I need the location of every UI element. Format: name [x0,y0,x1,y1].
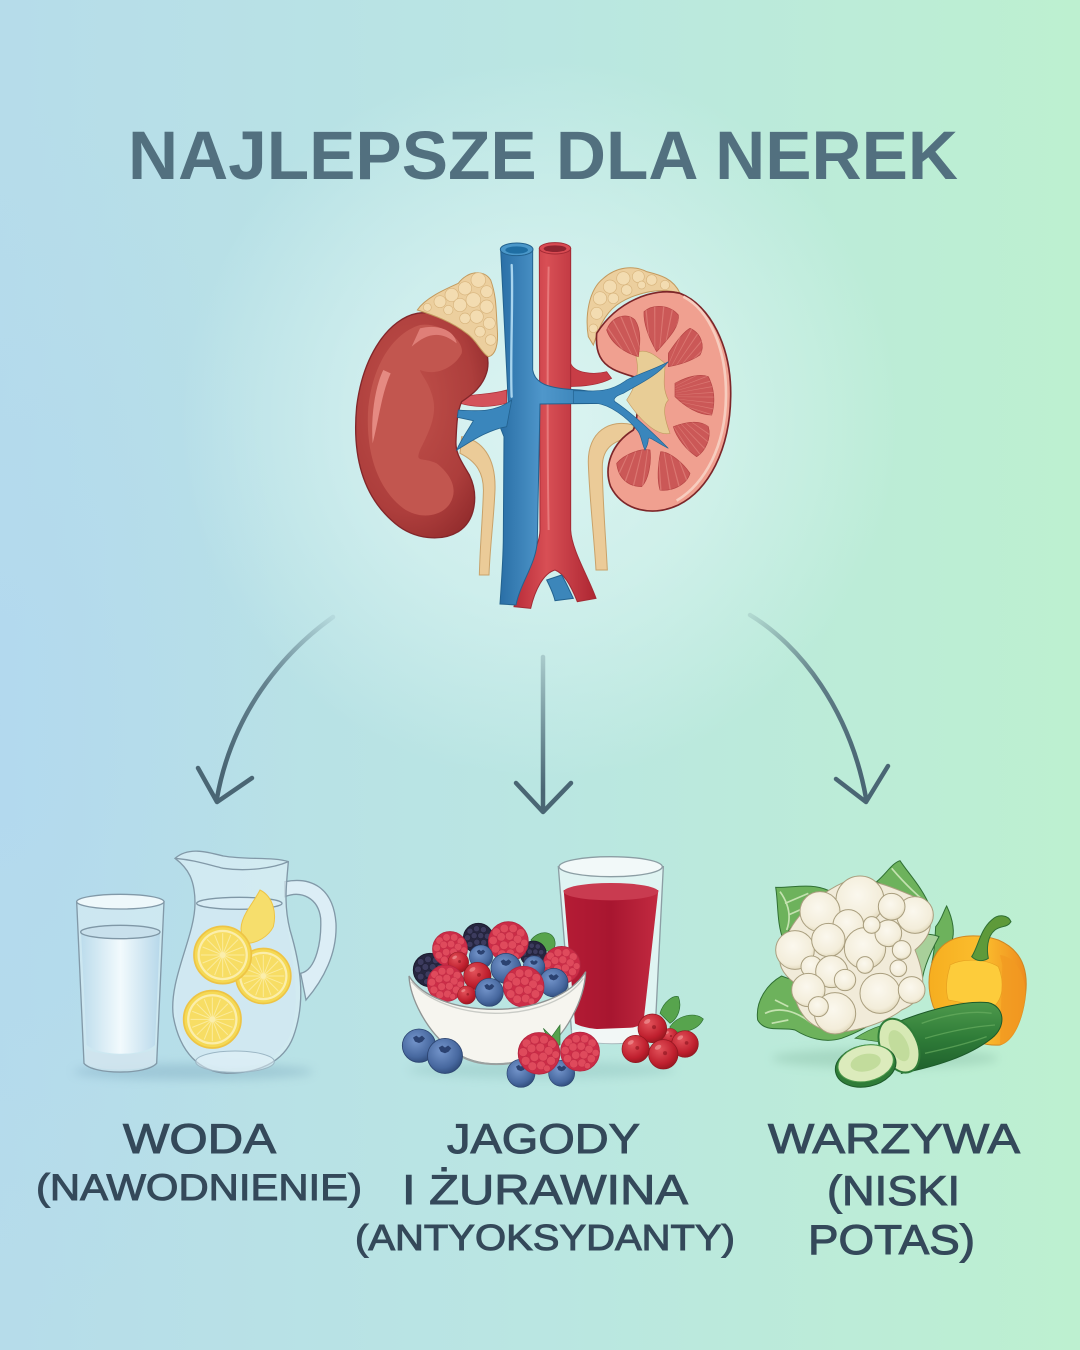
right ureter [588,423,633,570]
arrow to vegetables [750,615,888,802]
aorta [514,243,612,608]
label: berries and cranberry: JAGODY [447,1115,640,1162]
cauliflower [776,876,933,1034]
kidney anatomy illustration [356,243,731,608]
loose blueberries [402,1029,575,1087]
pyramid stripes [588,330,722,463]
renal vein branches [573,362,668,450]
pitcher body [173,851,301,1073]
label: vegetables [768,1115,1020,1263]
label: water: (NAWODNIENIE) [36,1167,362,1208]
label: berries and cranberry [355,1115,735,1258]
arrow to water [198,617,333,802]
shadow [408,1061,675,1079]
berries in the bowl [413,922,580,1007]
label: berries and cranberry: (ANTYOKSYDANTY) [355,1217,735,1258]
vena cava [457,243,607,605]
right adrenal gland [587,268,680,345]
arrow to berries [516,657,571,812]
left adrenal gland [417,273,498,357]
cranberries with leaves [622,996,703,1069]
label: vegetables: POTAS) [808,1216,975,1263]
bowl [409,972,586,1064]
vegetables [757,861,1026,1093]
pitcher rim [175,858,288,870]
left ureter [460,437,495,575]
label: water: WODA [123,1115,276,1162]
label: vegetables: (NISKI [827,1167,960,1214]
pitcher water [176,903,296,1068]
pitcher base [196,1051,274,1072]
glass of water [77,894,164,1072]
left renal artery [460,390,507,406]
pitcher handle [285,880,336,1000]
juice glass [558,857,663,1044]
water glass and lemon pitcher [73,851,336,1080]
leaves [757,861,953,1040]
yellow pepper [929,916,1026,1045]
cucumber [831,1002,1002,1093]
label: water [36,1115,362,1208]
label: vegetables: WARZYWA [768,1115,1020,1162]
berries bowl and cranberry juice [402,857,703,1087]
right kidney cross-section [573,292,731,511]
leaf [531,933,555,952]
kidney pelvis [627,351,670,434]
shadow [73,1064,313,1080]
label: berries and cranberry: I ŻURAWINA [402,1166,688,1213]
title: NAJLEPSZE DLA NEREK [128,117,958,194]
loose raspberries [518,1025,599,1074]
renal pyramids [607,306,714,490]
left kidney [356,313,488,538]
infographic canvas [38,131,1027,1263]
shadow [772,1048,998,1068]
lemon slices [184,890,291,1048]
